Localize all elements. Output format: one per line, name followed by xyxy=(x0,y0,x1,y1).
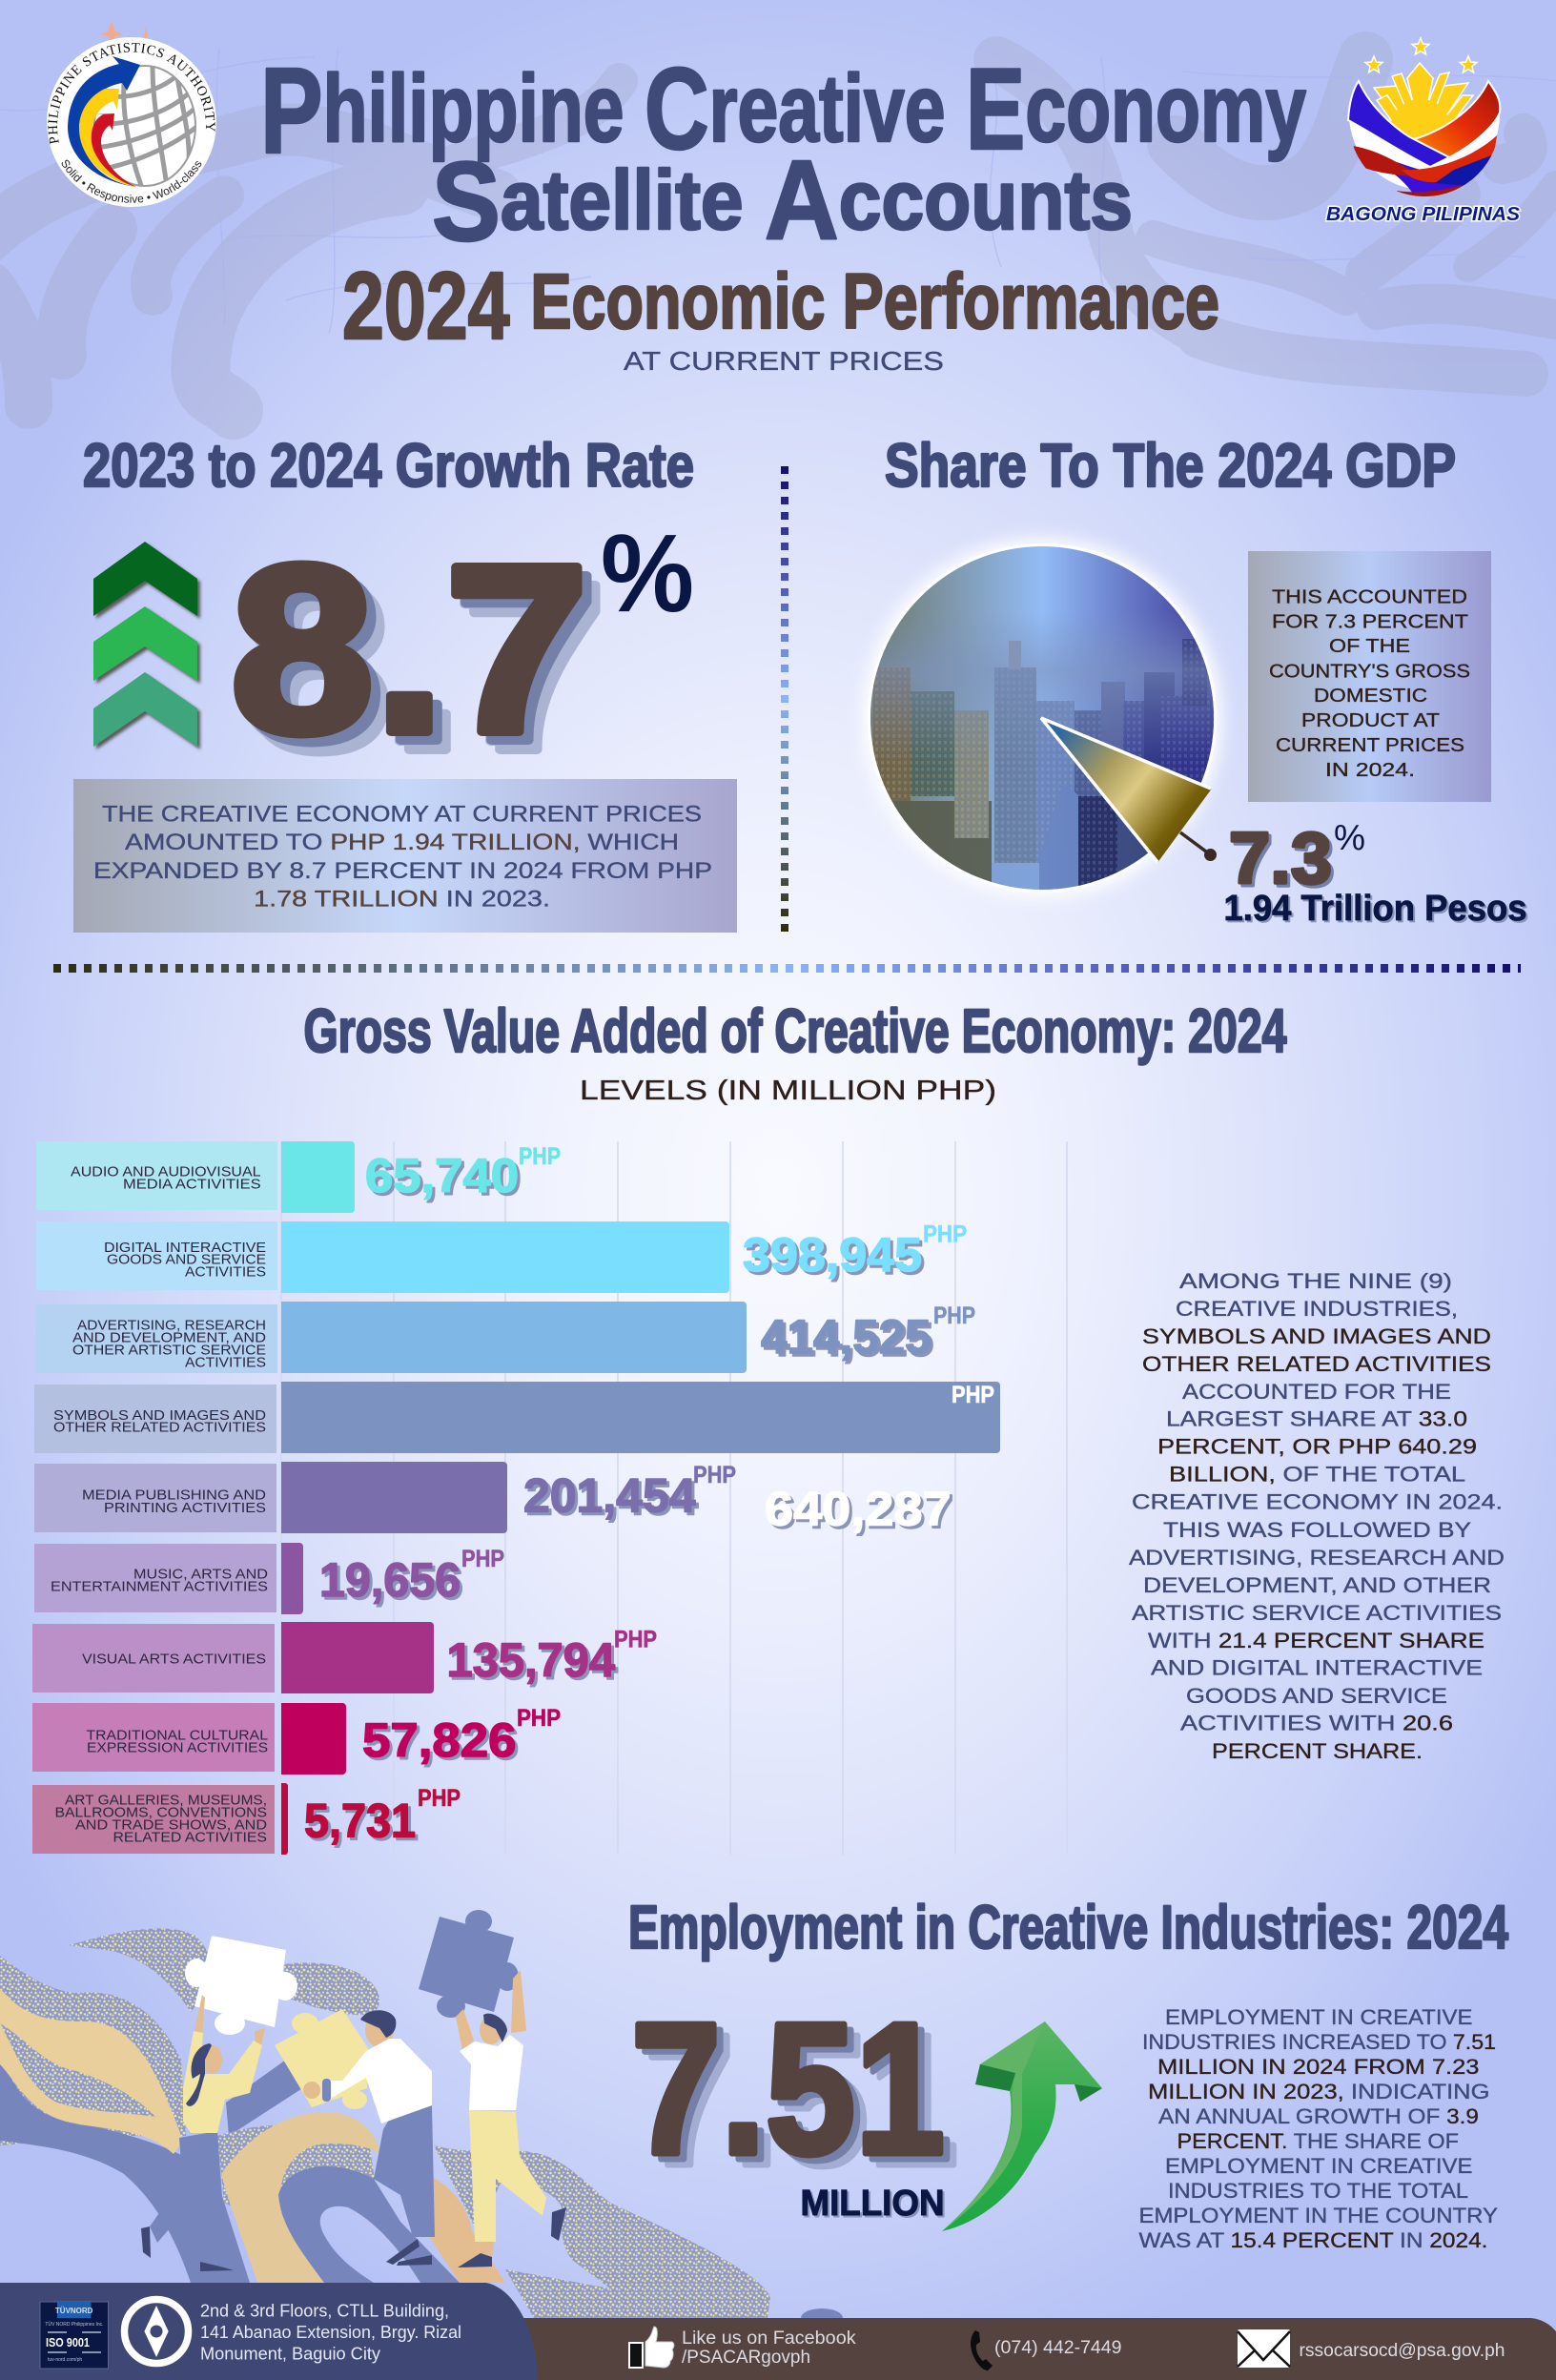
row: traditional cultural expression: EXPRESSION ACTIVITIES xyxy=(87,1741,268,1756)
text block: industry shares: BILLION, OF THE TOTAL xyxy=(1169,1463,1465,1486)
value: 7.3 percent: % xyxy=(1334,818,1365,858)
footer: address: 141 Abanao Extension, Brgy. Rizal xyxy=(200,2323,461,2342)
row: symbols and images: SYMBOLS AND IMAGES AND xyxy=(53,1408,266,1424)
text box: GDP share description: CURRENT PRICES xyxy=(1276,735,1464,756)
value: 1.94 trillion pesos: 1.94 Trillion Pesos xyxy=(1224,889,1527,929)
text box: GDP share description: COUNTRY'S GROSS xyxy=(1269,662,1470,683)
row: advertising, research: 414,525 xyxy=(761,1310,931,1364)
text block: industry shares: SYMBOLS AND IMAGES AND xyxy=(1142,1324,1491,1348)
text block: industry shares: ACCOUNTED FOR THE xyxy=(1182,1380,1451,1404)
row: symbols and images: 640,287 xyxy=(765,1482,952,1535)
text box: growth description: 1.78 TRILLION IN 2023. xyxy=(254,887,550,912)
logo: Philippine Statistics Authority: Solid • Responsive • World-class xyxy=(61,160,202,203)
row: digital interactive: ACTIVITIES xyxy=(185,1264,266,1280)
text block: industry shares: OTHER RELATED ACTIVITIES xyxy=(1142,1352,1491,1376)
row: music, arts and entertainment: ENTERTAINMENT ACTIVITIES xyxy=(51,1579,268,1594)
row: advertising, research: AND DEVELOPMENT, AND xyxy=(72,1331,266,1346)
footer: facebook: Like us on Facebook xyxy=(682,2329,856,2349)
icon: envelope xyxy=(1238,2329,1290,2368)
text block: employment description: EMPLOYMENT IN THE COUNTRY xyxy=(1138,2204,1498,2227)
text block: employment description: AN ANNUAL GROWTH OF 3.9 xyxy=(1158,2104,1479,2128)
text block: industry shares: ACTIVITIES WITH 20.6 xyxy=(1180,1711,1453,1735)
row: music, arts and entertainment: 19,656 xyxy=(319,1553,461,1607)
subtitle: at current prices: AT CURRENT PRICES xyxy=(624,346,944,376)
text box: GDP share description: PRODUCT AT xyxy=(1301,710,1440,731)
row: advertising, research: ADVERTISING, RESEARCH xyxy=(77,1318,266,1333)
text block: industry shares: LARGEST SHARE AT 33.0 xyxy=(1166,1407,1467,1430)
row: art galleries and museums: 5,731 xyxy=(304,1795,416,1848)
logo: Bagong Pilipinas xyxy=(1326,38,1521,225)
decorative swirls behind header xyxy=(0,59,1556,410)
row: media publishing xyxy=(34,1462,736,1533)
text box: GDP share description: FOR 7.3 PERCENT xyxy=(1272,612,1468,633)
text block: employment description: PERCENT. THE SHARE OF xyxy=(1177,2129,1459,2153)
text block: employment description xyxy=(1138,2005,1498,2252)
subtitle: 2024 economic performance: 2024 xyxy=(342,253,530,359)
subtitle: 2024 economic performance: Economic Performance xyxy=(530,258,1219,345)
row: advertising, research: PHP xyxy=(933,1303,975,1329)
title: P xyxy=(260,43,323,179)
puzzle piece: yellow xyxy=(275,2009,370,2109)
badge: ISO 9001 xyxy=(40,2302,109,2369)
text box: growth description: THE CREATIVE ECONOMY AT CURRENT PRICES xyxy=(102,801,702,828)
text block: industry shares: PERCENT, OR PHP 640.29 xyxy=(1157,1434,1477,1459)
badge: ISO 9001: TÜVNORD xyxy=(55,2307,93,2315)
title: reative xyxy=(709,55,966,162)
puzzle piece: white xyxy=(185,1936,297,2035)
row: art galleries and museums: ART GALLERIES, MUSEUMS, xyxy=(65,1793,267,1808)
text box: GDP share description: DOMESTIC xyxy=(1314,686,1427,707)
text block: industry shares: CREATIVE INDUSTRIES, xyxy=(1176,1297,1458,1321)
text box: GDP share description: OF THE xyxy=(1329,636,1410,657)
illustration: people assembling puzzle pieces xyxy=(0,1910,843,2328)
label: million: MILLION xyxy=(801,2184,944,2224)
row: media publishing: PRINTING ACTIVITIES xyxy=(104,1501,266,1516)
row: music, arts and entertainment: MUSIC, ARTS AND xyxy=(133,1568,268,1583)
title: A xyxy=(765,137,839,263)
row: symbols and images: PHP xyxy=(952,1382,994,1408)
logo: Bagong Pilipinas: BAGONG PILIPINAS xyxy=(1326,204,1521,225)
text block: employment description: MILLION IN 2024 FROM 7.23 xyxy=(1157,2055,1480,2079)
subheading: levels: LEVELS (IN MILLION PHP) xyxy=(580,1076,996,1106)
text block: industry shares xyxy=(1129,1269,1505,1763)
footer: navy address panel xyxy=(0,2283,538,2380)
text box: GDP share description xyxy=(1248,551,1491,802)
footer: email: rssocarsocd@psa.gov.ph xyxy=(1299,2341,1505,2361)
value: 7.3 percent: 7.3 xyxy=(1229,818,1332,899)
row: advertising, research: ACTIVITIES xyxy=(185,1356,266,1371)
big number: 8.7 percent: % xyxy=(601,511,694,635)
person: man with yellow piece xyxy=(303,2010,435,2266)
row: visual arts: VISUAL ARTS ACTIVITIES xyxy=(82,1652,266,1667)
heading: share to GDP: Share To The 2024 GDP xyxy=(885,431,1456,500)
row: symbols and images: OTHER RELATED ACTIVITIES xyxy=(53,1421,266,1436)
footer: facebook xyxy=(682,2329,856,2368)
text block: industry shares: CREATIVE ECONOMY IN 2024. xyxy=(1132,1489,1503,1514)
row: music, arts and entertainment: PHP xyxy=(461,1546,504,1572)
text box: growth description: AMOUNTED TO PHP 1.94 TRILLION, WHICH xyxy=(125,830,679,855)
text block: industry shares: ADVERTISING, RESEARCH AND xyxy=(1129,1546,1505,1570)
text box: growth description: EXPANDED BY 8.7 PERCENT IN 2024 FROM PHP xyxy=(93,858,712,884)
big number: 7.51: 7.51 xyxy=(631,1984,945,2193)
heading: growth rate: 2023 to 2024 Growth Rate xyxy=(83,431,694,500)
text block: industry shares: THIS WAS FOLLOWED BY xyxy=(1163,1518,1471,1542)
row: digital interactive: 398,945 xyxy=(743,1228,922,1282)
icon: green up chevrons xyxy=(93,542,197,747)
text block: industry shares: AND DIGITAL INTERACTIVE xyxy=(1151,1655,1483,1680)
text block: industry shares: GOODS AND SERVICE xyxy=(1186,1684,1447,1708)
badge: ISO 9001: ISO 9001 xyxy=(46,2335,90,2349)
footer: facebook: /PSACARgovph xyxy=(682,2348,810,2368)
text box: GDP share description: IN 2024. xyxy=(1325,760,1415,781)
icon: facebook thumbs up xyxy=(629,2327,674,2368)
title: atellite xyxy=(501,153,765,247)
row: audio and audiovisual: AUDIO AND AUDIOVISUAL xyxy=(71,1165,261,1180)
footer: brown contact band xyxy=(477,2318,1556,2380)
title: C xyxy=(645,44,709,174)
row: audio and audiovisual xyxy=(36,1141,561,1213)
logo: Philippine Statistics Authority xyxy=(47,21,216,207)
text block: industry shares: PERCENT SHARE. xyxy=(1212,1739,1423,1763)
title: ccounts xyxy=(839,153,1133,247)
row: traditional cultural expression: 57,826 xyxy=(362,1713,517,1767)
text block: industry shares: ARTISTIC SERVICE ACTIVITIES xyxy=(1132,1601,1502,1625)
row: visual arts xyxy=(32,1622,657,1693)
text block: industry shares: DEVELOPMENT, AND OTHER xyxy=(1143,1573,1491,1597)
row: digital interactive xyxy=(36,1221,967,1293)
text block: industry shares: AMONG THE NINE (9) xyxy=(1179,1269,1452,1293)
row: visual arts: 135,794 xyxy=(446,1633,615,1687)
badge: ISO 9001: tuv-nord.com/ph xyxy=(48,2357,82,2363)
row: traditional cultural expression xyxy=(32,1703,561,1775)
person: woman xyxy=(141,1995,265,2271)
text block: industry shares: WITH 21.4 PERCENT SHARE xyxy=(1148,1629,1484,1652)
badge: ISO 9001: TÜV NORD Philippines Inc. xyxy=(45,2321,104,2328)
text box: growth description xyxy=(73,779,737,933)
row: traditional cultural expression: TRADITIONAL CULTURAL xyxy=(86,1728,268,1743)
row: visual arts: PHP xyxy=(614,1627,657,1653)
row: art galleries and museums xyxy=(32,1783,461,1855)
text box: GDP share description: THIS ACCOUNTED xyxy=(1272,587,1467,608)
row: digital interactive: GOODS AND SERVICE xyxy=(107,1253,266,1268)
title: E xyxy=(966,44,1025,174)
row: audio and audiovisual: PHP xyxy=(519,1143,561,1170)
bar chart: gross value added by industry xyxy=(32,1141,1067,1855)
big number: 8.7 percent: 8.7 xyxy=(231,516,588,782)
row: digital interactive: PHP xyxy=(923,1221,967,1247)
row: advertising, research: OTHER ARTISTIC SERVICE xyxy=(72,1343,266,1358)
row: digital interactive: DIGITAL INTERACTIVE xyxy=(104,1241,266,1256)
person: man with blue piece xyxy=(456,1970,566,2267)
footer: address: 2nd & 3rd Floors, CTLL Building, xyxy=(200,2302,449,2321)
title: conomy xyxy=(1025,55,1306,162)
row: advertising, research xyxy=(35,1302,975,1373)
row: audio and audiovisual: MEDIA ACTIVITIES xyxy=(123,1177,261,1192)
row: art galleries and museums: AND TRADE SHOWS, AND xyxy=(75,1817,267,1833)
row: traditional cultural expression: PHP xyxy=(517,1705,561,1732)
faint grid lines xyxy=(0,48,1556,334)
row: art galleries and museums: BALLROOMS, CONVENTIONS xyxy=(55,1806,267,1821)
row: audio and audiovisual: 65,740 xyxy=(365,1149,519,1202)
row: music, arts and entertainment xyxy=(34,1543,504,1614)
text block: employment description: WAS AT 15.4 PERCENT IN 2024. xyxy=(1138,2228,1487,2252)
footer: address xyxy=(200,2302,461,2363)
row: symbols and images xyxy=(34,1382,1000,1535)
row: media publishing: MEDIA PUBLISHING AND xyxy=(82,1488,266,1503)
row: art galleries and museums: PHP xyxy=(418,1785,461,1812)
icon: phone xyxy=(971,2330,993,2370)
pointer from slice to value xyxy=(1180,832,1217,861)
text block: employment description: INDUSTRIES TO THE TOTAL xyxy=(1168,2179,1468,2203)
chart: pie with city skyline, 7.3 percent slice xyxy=(863,539,1221,897)
logo: Philippine Statistics Authority: PHILIPPINE STATISTICS AUTHORITY xyxy=(48,42,215,145)
title xyxy=(260,43,1306,265)
footer: phone number: (074) 442-7449 xyxy=(994,2338,1121,2358)
text block: employment description: EMPLOYMENT IN CREATIVE xyxy=(1165,2154,1472,2178)
icon: green rising arrow xyxy=(942,2021,1102,2231)
title: S xyxy=(432,139,501,265)
text block: employment description: MILLION IN 2023, INDICATING xyxy=(1148,2080,1489,2103)
text block: employment description: EMPLOYMENT IN CREATIVE xyxy=(1165,2005,1472,2029)
row: media publishing: PHP xyxy=(693,1462,736,1488)
title: hilippine xyxy=(323,55,645,162)
row: media publishing: 201,454 xyxy=(523,1468,696,1522)
row: art galleries and museums: RELATED ACTIVITIES xyxy=(113,1831,267,1846)
footer: address: Monument, Baguio City xyxy=(200,2344,380,2363)
icon: compass xyxy=(124,2300,189,2363)
text block: employment description: INDUSTRIES INCREASED TO 7.51 xyxy=(1142,2030,1496,2054)
puzzle piece: blue xyxy=(419,1910,519,2018)
